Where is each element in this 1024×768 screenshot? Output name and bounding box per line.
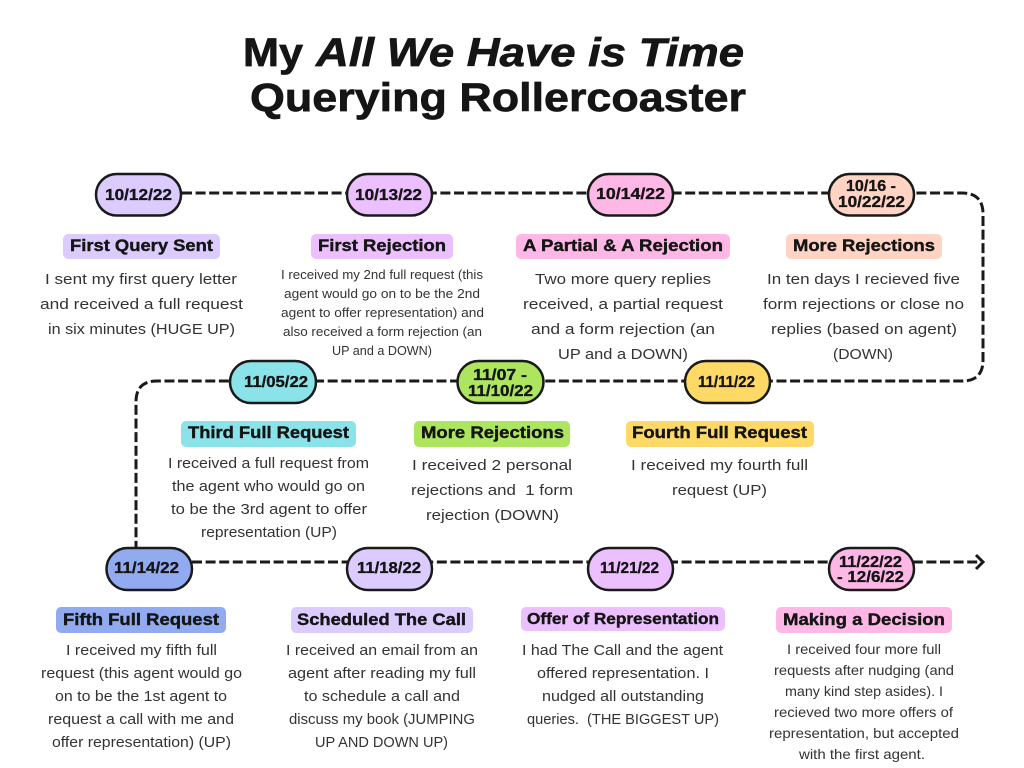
card: 10/14/22 A Partial & A Rejection: 10/14/22 — [596, 186, 665, 203]
card: 11/07 - 11/10/22 More Rejections: rejections and 1 form — [411, 482, 573, 499]
card: 11/18/22 Scheduled The Call: 11/18/22 — [357, 560, 421, 577]
dashed timeline path — [136, 193, 983, 569]
card: 11/14/22 Fifth Full Request: Fifth Full Request — [63, 610, 219, 629]
card: 11/14/22 Fifth Full Request: I received my fifth full — [66, 642, 217, 659]
card: 10/12/22 First Query Sent: I sent my first query letter — [45, 271, 237, 288]
card: 11/11/22 Fourth Full Request: Fourth Full Request — [632, 423, 807, 442]
card: 11/05/22 Third Full Request: the agent who would go on — [172, 478, 365, 495]
card: 10/13/22 First Rejection: UP and a DOWN) — [332, 343, 432, 358]
card: 11/07 - 11/10/22 More Rejections: rejection (DOWN) — [426, 507, 559, 524]
card: 11/18/22 Scheduled The Call: Scheduled The Call — [297, 610, 466, 629]
card: 11/21/22 Offer of Representation: offered representation. I — [537, 665, 709, 682]
card: 11/21/22 Offer of Representation: nudged all outstanding — [542, 688, 704, 705]
title — [243, 31, 746, 120]
card: 11/21/22 Offer of Representation — [521, 548, 725, 728]
card: 10/16 - 10/22/22 More Rejections: form rejections or close no — [763, 296, 964, 313]
card: 11/14/22 Fifth Full Request — [41, 548, 242, 751]
card: 10/16 - 10/22/22 More Rejections: replies (based on agent) — [771, 321, 957, 338]
card: 10/13/22 First Rejection: I received my 2nd full request (this — [281, 267, 484, 282]
card: 11/21/22 Offer of Representation: Offer of Representation — [527, 611, 719, 628]
card: 11/18/22 Scheduled The Call: discuss my book (JUMPING — [289, 711, 475, 728]
card: 10/13/22 First Rejection: agent to offer representation) and — [281, 305, 484, 320]
card: 11/22/22 - 12/6/22 Making a Decision: representation, but accepted — [769, 725, 959, 741]
card: 10/14/22 A Partial & A Rejection: A Partial & A Rejection — [523, 236, 723, 255]
title: All We Have is Time — [315, 31, 744, 75]
card: 11/05/22 Third Full Request — [168, 361, 369, 541]
title: My — [243, 31, 304, 75]
card: 11/14/22 Fifth Full Request: request (this agent would go — [41, 665, 242, 682]
card: 10/13/22 First Rejection: First Rejection — [318, 236, 446, 255]
card: 10/14/22 A Partial & A Rejection: received, a partial request — [523, 296, 724, 313]
card: 11/11/22 Fourth Full Request: 11/11/22 — [698, 374, 755, 391]
card: 10/12/22 First Query Sent: and received a full request — [40, 296, 244, 313]
card: 10/16 - 10/22/22 More Rejections: More Rejections — [793, 236, 935, 255]
card: 10/16 - 10/22/22 More Rejections: 10/22/22 — [838, 194, 905, 211]
card: 10/16 - 10/22/22 More Rejections: In ten days I recieved five — [767, 271, 960, 288]
card: 11/22/22 - 12/6/22 Making a Decision: - 12/6/22 — [837, 569, 904, 586]
card: 11/05/22 Third Full Request: 11/05/22 — [244, 374, 308, 391]
card: 11/07 - 11/10/22 More Rejections: 11/07 - — [473, 367, 527, 384]
card: 10/12/22 First Query Sent — [40, 174, 244, 338]
card: 11/21/22 Offer of Representation: queries. (THE BIGGEST UP) — [527, 711, 719, 728]
card: 10/16 - 10/22/22 More Rejections: 10/16 - — [846, 178, 896, 195]
card: 11/14/22 Fifth Full Request: on to be the 1st agent to — [55, 688, 227, 705]
card: 11/05/22 Third Full Request: representation (UP) — [201, 524, 337, 541]
card: 10/14/22 A Partial & A Rejection: and a form rejection (an — [531, 321, 715, 338]
card: 11/14/22 Fifth Full Request: offer representation) (UP) — [52, 734, 231, 751]
card: 11/18/22 Scheduled The Call: to schedule a call and — [304, 688, 460, 705]
card: 11/22/22 - 12/6/22 Making a Decision: Making a Decision — [783, 610, 945, 629]
card: 11/11/22 Fourth Full Request: request (UP) — [672, 482, 767, 499]
card: 11/07 - 11/10/22 More Rejections: More Rejections — [421, 423, 564, 442]
card: 11/18/22 Scheduled The Call: I received an email from an — [286, 642, 478, 659]
card: 10/13/22 First Rejection — [281, 174, 484, 358]
title: Querying Rollercoaster — [250, 76, 746, 120]
card: 10/12/22 First Query Sent: in six minutes (HUGE UP) — [48, 321, 235, 338]
card: 10/12/22 First Query Sent: 10/12/22 — [105, 187, 172, 204]
card: 11/18/22 Scheduled The Call — [286, 548, 478, 751]
card: 11/07 - 11/10/22 More Rejections — [411, 361, 573, 524]
card: 11/22/22 - 12/6/22 Making a Decision: 11/22/22 — [839, 554, 902, 571]
card: 11/22/22 - 12/6/22 Making a Decision — [769, 548, 959, 762]
card: 10/16 - 10/22/22 More Rejections — [763, 174, 964, 363]
card: 11/07 - 11/10/22 More Rejections: 11/10/22 — [468, 383, 533, 400]
card: 11/11/22 Fourth Full Request: I received my fourth full — [631, 457, 808, 474]
card: 10/16 - 10/22/22 More Rejections: (DOWN) — [833, 346, 893, 363]
card: 11/05/22 Third Full Request: to be the 3rd agent to offer — [171, 501, 367, 518]
card: 11/22/22 - 12/6/22 Making a Decision: recieved two more offers of — [774, 704, 953, 720]
card: 10/13/22 First Rejection: also received a form rejection (an — [283, 324, 482, 339]
card: 11/05/22 Third Full Request: Third Full Request — [188, 423, 349, 442]
card: 10/14/22 A Partial & A Rejection — [516, 174, 730, 363]
card: 11/21/22 Offer of Representation: 11/21/22 — [600, 560, 659, 577]
card: 11/18/22 Scheduled The Call: agent after reading my full — [288, 665, 476, 682]
card: 11/14/22 Fifth Full Request: 11/14/22 — [114, 560, 179, 577]
card: 11/07 - 11/10/22 More Rejections: I received 2 personal — [412, 457, 572, 474]
card: 10/14/22 A Partial & A Rejection: UP and a DOWN) — [558, 346, 688, 363]
card: 11/21/22 Offer of Representation: I had The Call and the agent — [522, 642, 724, 659]
card: 11/05/22 Third Full Request: I received a full request from — [168, 455, 369, 472]
card: 11/22/22 - 12/6/22 Making a Decision: many kind step asides). I — [785, 683, 943, 699]
card: 10/14/22 A Partial & A Rejection: Two more query replies — [535, 271, 711, 288]
card: 11/22/22 - 12/6/22 Making a Decision: with the first agent. — [798, 746, 925, 762]
card: 11/11/22 Fourth Full Request — [626, 361, 814, 499]
card: 11/18/22 Scheduled The Call: UP AND DOWN UP) — [315, 734, 448, 751]
card: 10/13/22 First Rejection: agent would go on to be the 2nd — [284, 286, 480, 301]
card: 11/22/22 - 12/6/22 Making a Decision: requests after nudging (and — [774, 662, 954, 678]
card: 11/14/22 Fifth Full Request: request a call with me and — [48, 711, 234, 728]
card: 10/12/22 First Query Sent: First Query Sent — [70, 236, 213, 255]
card: 11/22/22 - 12/6/22 Making a Decision: I received four more full — [787, 641, 941, 657]
card: 10/13/22 First Rejection: 10/13/22 — [355, 187, 422, 204]
